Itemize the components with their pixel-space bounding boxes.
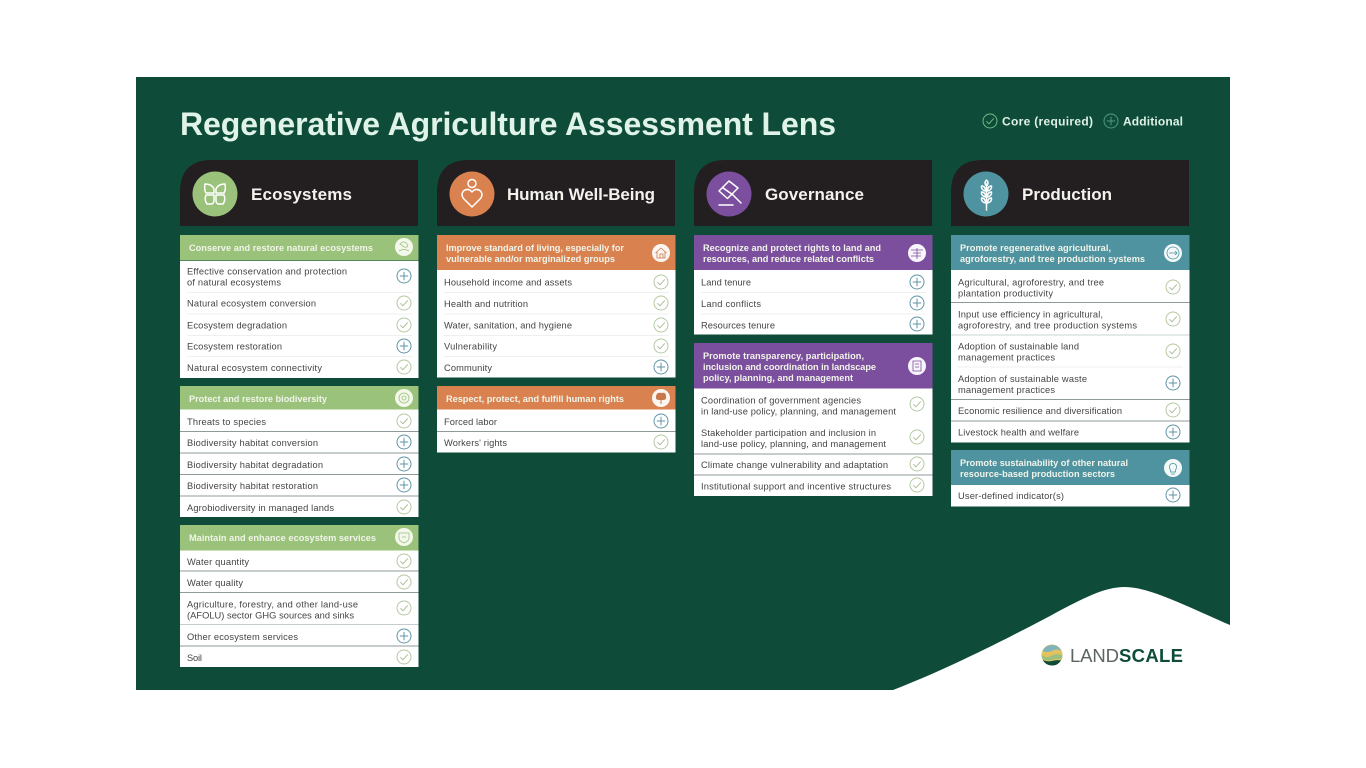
legend [983, 114, 1183, 128]
row [187, 414, 411, 428]
section: improve standard of living [437, 235, 676, 378]
row [958, 403, 1180, 417]
header: production: Production [1022, 185, 1112, 204]
row: agroforestry, and tree production systems [958, 320, 1137, 330]
header: ecosystems [180, 160, 418, 226]
row: Resources tenure [701, 320, 775, 330]
section: protect and restore biodiversity [180, 386, 418, 517]
row: (AFOLU) sector GHG sources and sinks [187, 610, 354, 620]
row: land-use policy, planning, and management [701, 439, 886, 449]
row: Community [444, 363, 492, 373]
row [701, 317, 924, 331]
row [187, 600, 411, 620]
row: Biodiversity habitat restoration [187, 481, 318, 491]
section: promote regenerative agricultural [951, 235, 1190, 442]
header: ecosystems: Ecosystems [251, 185, 352, 204]
row: Water quality [187, 578, 243, 588]
section: conserve and restore natural ecosystems: Conserve and restore natural ecosystems [189, 243, 373, 253]
row [187, 629, 411, 643]
icon: butterfly [205, 184, 225, 204]
logo: landscale [1042, 644, 1183, 666]
row: Forced labor [444, 417, 497, 427]
row [187, 318, 411, 332]
icon: house badge [652, 244, 670, 262]
row: Natural ecosystem conversion [187, 298, 316, 308]
row: Ecosystem degradation [187, 320, 287, 330]
row: Household income and assets [444, 278, 572, 288]
section: promote sustainability of other sectors: resource-based production sectors [960, 469, 1115, 479]
panel: ecosystems [180, 160, 418, 667]
section: improve standard of living: Improve standard of living, especially for [446, 243, 624, 253]
icon: wheat [981, 180, 992, 210]
row [958, 342, 1180, 362]
row [187, 339, 411, 353]
row: plantation productivity [958, 288, 1053, 298]
panel: governance [694, 160, 932, 496]
section: recognize and protect rights [694, 235, 932, 334]
icon: tree badge [652, 389, 670, 407]
section: improve standard of living: vulnerable and/or marginalized groups [446, 254, 615, 264]
row: Land conflicts [701, 299, 761, 309]
section: recognize and protect rights: resources, and reduce related conflicts [703, 254, 874, 264]
row: Threats to species [187, 417, 266, 427]
row: Institutional support and incentive structures [701, 482, 891, 492]
row: Effective conservation and protection [187, 266, 347, 276]
row: User-defined indicator(s) [958, 491, 1064, 501]
section: promote transparency: policy, planning, and management [703, 373, 853, 383]
row [444, 435, 668, 449]
row: Vulnerability [444, 342, 497, 352]
icon: nature badge [395, 238, 413, 256]
background panel [136, 77, 1230, 690]
row: Input use efficiency in agricultural, [958, 310, 1103, 320]
section: promote regenerative agricultural: Promote regenerative agricultural, [960, 243, 1111, 253]
row [958, 278, 1180, 298]
row: Coordination of government agencies [701, 396, 861, 406]
row: Workers' rights [444, 438, 507, 448]
header: governance [694, 160, 932, 226]
row: of natural ecosystems [187, 278, 281, 288]
row [958, 374, 1180, 395]
row [444, 318, 668, 332]
row: Health and nutrition [444, 299, 528, 309]
row [701, 457, 924, 471]
row [701, 428, 924, 449]
section: respect, protect, and fulfill human rights [437, 386, 676, 452]
icon: lightbulb badge [1164, 459, 1182, 477]
row: Other ecosystem services [187, 632, 298, 642]
row: management practices [958, 352, 1055, 362]
header: production [951, 160, 1189, 226]
row [187, 457, 411, 471]
row: Economic resilience and diversification [958, 406, 1122, 416]
icon: signpost badge [908, 244, 926, 262]
row [958, 310, 1180, 330]
row: Natural ecosystem connectivity [187, 363, 322, 373]
legend: core: Core (required) [1002, 114, 1093, 128]
section: promote transparency [694, 343, 932, 496]
section: maintain and enhance ecosystem services [180, 525, 418, 667]
section: promote transparency: Promote transparency, participation, [703, 351, 864, 361]
row: Ecosystem restoration [187, 342, 282, 352]
section: promote transparency: inclusion and coordination in landscape [703, 362, 876, 372]
logo mark [1042, 644, 1062, 666]
row [187, 360, 411, 374]
icon: biodiversity badge [395, 389, 413, 407]
row [187, 575, 411, 589]
panel: human well-being [437, 160, 676, 452]
section: recognize and protect rights: Recognize and protect rights to land and [703, 243, 881, 253]
icon: document badge [908, 357, 926, 375]
row [187, 266, 411, 288]
section: promote sustainability of other sectors [951, 450, 1190, 506]
row [701, 396, 924, 416]
header: human well-being [437, 160, 675, 226]
row [187, 650, 411, 664]
title: Regenerative Agriculture Assessment Lens [180, 106, 836, 142]
row [187, 296, 411, 310]
row: Adoption of sustainable land [958, 342, 1079, 352]
row [187, 435, 411, 449]
logo: landscale: LAND [1070, 645, 1119, 666]
row [187, 500, 411, 514]
row: in land-use policy, planning, and management [701, 406, 896, 416]
row [958, 425, 1180, 439]
row: Water, sanitation, and hygiene [444, 320, 572, 330]
logo: landscale: SCALE [1119, 645, 1183, 666]
row [701, 478, 924, 492]
row: Biodiversity habitat degradation [187, 460, 323, 470]
row: Climate change vulnerability and adaptation [701, 460, 888, 470]
row [701, 296, 924, 310]
row [187, 554, 411, 568]
section: conserve and restore natural ecosystems [180, 235, 418, 378]
row [187, 478, 411, 492]
row: Soil [187, 653, 202, 663]
icon: services badge [395, 528, 413, 546]
row [444, 275, 668, 289]
row [444, 296, 668, 310]
row: management practices [958, 385, 1055, 395]
panel: production [951, 160, 1190, 506]
icon: person with heart [462, 180, 482, 207]
section: promote regenerative agricultural: agroforestry, and tree production systems [960, 254, 1145, 264]
row: Agrobiodiversity in managed lands [187, 503, 334, 513]
row [444, 339, 668, 353]
header: governance: Governance [765, 185, 864, 204]
row: Livestock health and welfare [958, 428, 1079, 438]
row [444, 414, 668, 428]
row: Agriculture, forestry, and other land-use [187, 600, 358, 610]
section: respect, protect, and fulfill human rights: Respect, protect, and fulfill human rights [446, 394, 624, 404]
row [444, 360, 668, 374]
row [701, 275, 924, 289]
row: Land tenure [701, 278, 751, 288]
row: Biodiversity habitat conversion [187, 438, 318, 448]
row: Water quantity [187, 557, 249, 567]
icon: gavel [719, 181, 741, 205]
row: Stakeholder participation and inclusion in [701, 428, 876, 438]
row: Agricultural, agroforestry, and tree [958, 278, 1104, 288]
section: protect and restore biodiversity: Protect and restore biodiversity [189, 394, 328, 404]
legend: additional: Additional [1123, 114, 1183, 128]
icon: cycle badge [1164, 244, 1182, 262]
white wave corner [893, 587, 1230, 691]
header: human well-being: Human Well-Being [507, 185, 655, 204]
row [958, 488, 1180, 502]
section: maintain and enhance ecosystem services: Maintain and enhance ecosystem services [189, 533, 376, 543]
section: promote sustainability of other sectors: Promote sustainability of other natural [960, 458, 1128, 468]
row: Adoption of sustainable waste [958, 374, 1087, 384]
